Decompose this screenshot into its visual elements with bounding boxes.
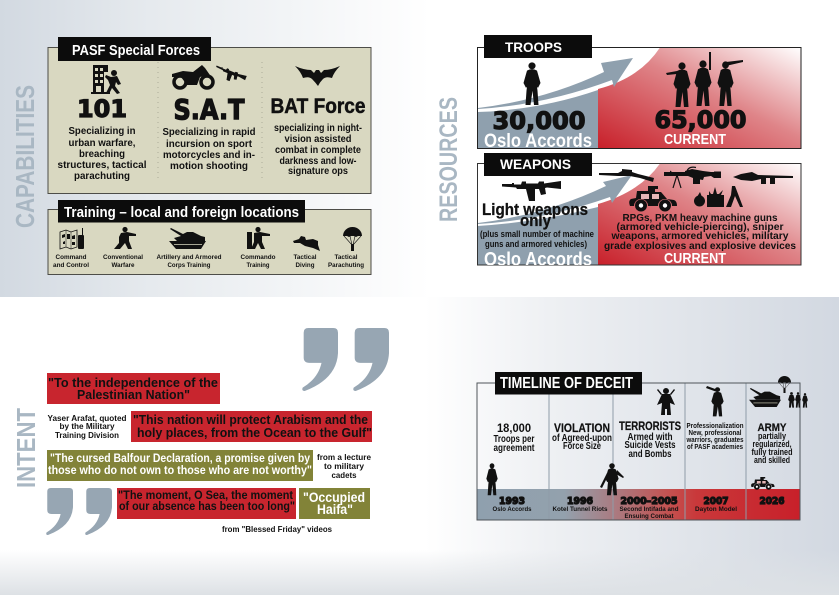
text block: BAT Force: combat in complete bbox=[275, 145, 361, 156]
timeline band bbox=[477, 489, 800, 520]
red current area bbox=[598, 48, 801, 148]
quote: sea: "The moment, O Sea, the moment bbox=[118, 490, 293, 502]
heading: timeline: TIMELINE OF DECEIT bbox=[500, 375, 633, 392]
icon: tank bbox=[749, 388, 781, 407]
icon: sniper rifle bbox=[599, 169, 654, 182]
column: violation: of Agreed-upon bbox=[552, 433, 612, 444]
year: 2026: 2026 bbox=[760, 496, 785, 507]
column: terrorists: TERRORISTS bbox=[619, 419, 681, 433]
section label: capabilities: CAPABILITIES bbox=[10, 85, 40, 228]
training labels: Tactical bbox=[334, 254, 358, 261]
text block: S.A.T: motorcycles and in- bbox=[163, 149, 255, 161]
arrow bbox=[478, 175, 632, 224]
attribution: Blessed Friday: from "Blessed Friday" videos bbox=[222, 524, 332, 534]
text block: light weapons: only bbox=[520, 211, 551, 230]
heading: troops bbox=[484, 35, 592, 58]
heading: weapons: WEAPONS bbox=[500, 156, 571, 172]
year: 2000-2005: Second Intifada and bbox=[620, 506, 678, 513]
text block: 101 bbox=[58, 95, 147, 182]
quote: Balfour bbox=[47, 450, 313, 481]
red current area bbox=[598, 164, 801, 265]
icon: bat bbox=[295, 66, 340, 86]
heading: troops: TROOPS bbox=[505, 39, 562, 55]
icon: parachute bbox=[778, 376, 791, 393]
icon: large closing quote bbox=[302, 328, 389, 391]
attribution: lecture: to military bbox=[324, 461, 364, 471]
training labels: and Control bbox=[53, 262, 89, 269]
icon: building and fighter bbox=[91, 65, 121, 94]
text block: current weapons: grade explosives and explosive devices bbox=[604, 240, 796, 252]
icon: RPG launcher bbox=[733, 172, 793, 184]
column: violation: Force Size bbox=[563, 441, 601, 452]
text block: light weapons: Light weapons bbox=[482, 200, 588, 219]
section label: resources: RESOURCES bbox=[435, 97, 463, 222]
training labels: Training bbox=[246, 262, 270, 269]
quote: independence: Palestinian Nation" bbox=[77, 387, 190, 402]
training labels: Warfare bbox=[112, 262, 135, 269]
year: 1993 bbox=[492, 496, 532, 513]
section label: intent: INTENT bbox=[11, 408, 41, 488]
label: Oslo Accords: Oslo Accords bbox=[484, 131, 592, 152]
icon: explosives bbox=[694, 187, 724, 207]
icon: humvee bbox=[629, 186, 677, 212]
year: 2000-2005 bbox=[620, 496, 678, 520]
heading: timeline bbox=[495, 372, 642, 394]
label: current: CURRENT bbox=[664, 250, 726, 267]
text block: light weapons bbox=[480, 200, 594, 249]
text block: BAT Force: vision assisted bbox=[284, 134, 352, 145]
training labels: Conventional bbox=[103, 254, 143, 261]
quote: independence bbox=[47, 373, 220, 404]
column: terrorists: Suicide Vests bbox=[624, 440, 676, 451]
column: 18,000: agreement bbox=[494, 443, 535, 454]
text block: BAT Force bbox=[270, 95, 366, 177]
column: professionalization bbox=[686, 421, 744, 451]
panel: PASF special forces bbox=[48, 37, 371, 194]
icon: map and radio bbox=[60, 228, 84, 249]
column: professionalization: New, professional bbox=[688, 428, 742, 437]
training labels: Command bbox=[56, 254, 87, 261]
icon: rifleman bbox=[706, 386, 724, 416]
text block: S.A.T bbox=[162, 93, 256, 172]
column: terrorists: Armed with bbox=[628, 432, 672, 443]
arrow bbox=[478, 58, 633, 109]
heading: training: Training – local and foreign locations bbox=[64, 205, 299, 221]
icon: suicide bomber bbox=[657, 388, 675, 415]
figure: 30,000: 30,000 bbox=[492, 107, 586, 135]
column: professionalization: Professionalization bbox=[686, 421, 744, 430]
panel: troops bbox=[478, 35, 801, 152]
text block: 101: 101 bbox=[77, 95, 127, 123]
label: current: CURRENT bbox=[664, 131, 726, 148]
text block: 101: structures, tactical bbox=[58, 159, 147, 171]
heading: training bbox=[58, 200, 305, 222]
column: terrorists bbox=[619, 419, 681, 460]
icon: masked fighter bbox=[600, 463, 624, 495]
training labels: Artillery and Armored bbox=[156, 254, 222, 261]
icon: motorcycle and rifle bbox=[172, 64, 247, 88]
icon: commando bbox=[247, 227, 270, 249]
icon: parachute bbox=[343, 227, 362, 251]
training labels: Corps Training bbox=[168, 262, 211, 269]
column: violation bbox=[552, 421, 612, 452]
icon: conventional soldier bbox=[114, 227, 136, 249]
year: 2000-2005: 2000–2005 bbox=[620, 496, 678, 507]
training labels: Diving bbox=[296, 262, 315, 269]
panel: weapons bbox=[478, 153, 801, 270]
heading: PASF Special Forces bbox=[58, 37, 211, 61]
column: army: regularized, bbox=[752, 439, 792, 449]
text block: S.A.T: incursion on sport bbox=[166, 138, 252, 150]
attribution: Arafat: by the Military bbox=[60, 421, 115, 431]
quote: Occupied Haifa: "Occupied bbox=[303, 489, 365, 505]
attribution: Arafat: Yaser Arafat, quoted bbox=[48, 413, 126, 423]
icon: soldier bbox=[524, 62, 540, 105]
text block: S.A.T: motion shooting bbox=[170, 160, 248, 172]
column: professionalization: warriors, graduates bbox=[686, 435, 744, 444]
column: 18,000 bbox=[494, 421, 535, 454]
column: 18,000: 18,000 bbox=[497, 421, 531, 435]
grey Oslo area bbox=[478, 207, 598, 265]
column: army: and skilled bbox=[754, 455, 790, 465]
training labels bbox=[53, 254, 364, 269]
column: army: ARMY bbox=[758, 422, 787, 434]
column: army: fully trained bbox=[752, 447, 792, 457]
column: terrorists: and Bombs bbox=[628, 449, 672, 460]
year: 1993: 1993 bbox=[499, 496, 525, 507]
quote: independence: "To the independence of the bbox=[48, 375, 218, 390]
column: army: partially bbox=[758, 431, 786, 441]
year: 2007: Dayton Model bbox=[695, 506, 737, 513]
quote: sea bbox=[117, 488, 296, 519]
icon: small quote bbox=[46, 488, 112, 535]
text block: BAT Force: BAT Force bbox=[270, 95, 366, 118]
year: 1993: Oslo Accords bbox=[492, 506, 532, 513]
text block: current weapons: weapons, armored vehicles, military bbox=[611, 230, 789, 242]
quote: Occupied Haifa bbox=[299, 488, 370, 519]
heading: weapons bbox=[484, 153, 592, 176]
text block: current weapons bbox=[604, 212, 796, 252]
column: 18,000: Troops per bbox=[494, 434, 535, 445]
icon: humvee bbox=[751, 477, 775, 490]
year: 2007: 2007 bbox=[704, 496, 728, 507]
text block: light weapons: guns and armored vehicles) bbox=[485, 239, 587, 249]
text block: S.A.T: S.A.T bbox=[174, 93, 244, 126]
text block: light weapons: (plus small number of machine bbox=[480, 229, 594, 239]
icon: early soldier bbox=[486, 463, 498, 495]
grey Oslo area bbox=[478, 90, 598, 148]
quote: Balfour: those who do not own to those who are not worthy" bbox=[48, 463, 312, 477]
quote: Arabism bbox=[131, 411, 372, 442]
training labels: Parachuting bbox=[328, 262, 364, 269]
heading: PASF Special Forces: PASF Special Forces bbox=[72, 43, 200, 59]
text block: S.A.T: Specializing in rapid bbox=[162, 126, 256, 138]
column: army bbox=[752, 422, 792, 465]
quote: Arabism: "This nation will protect Arabism and the bbox=[133, 412, 368, 427]
icon: diver bbox=[293, 236, 320, 251]
icon: mortar bbox=[726, 186, 743, 207]
label: Oslo Accords: Oslo Accords bbox=[484, 250, 592, 270]
icon: assault rifle bbox=[502, 181, 561, 201]
training labels: Tactical bbox=[294, 254, 317, 261]
icon: soldiers bbox=[788, 392, 808, 408]
figure: 65,000: 65,000 bbox=[654, 106, 746, 134]
text block: 101: breaching bbox=[79, 148, 125, 160]
attribution: Arafat: Training Division bbox=[55, 430, 119, 440]
text block: 101: parachuting bbox=[74, 170, 130, 182]
text block: BAT Force: specializing in night- bbox=[274, 123, 362, 134]
text block: 101: urban warfare, bbox=[68, 137, 136, 149]
training labels: Commando bbox=[240, 254, 276, 261]
icon: machine gun bbox=[664, 167, 721, 188]
quote: Balfour: "The cursed Balfour Declaration, a promise given by bbox=[50, 451, 310, 465]
attribution: Arafat bbox=[48, 413, 126, 440]
text block: current weapons: RPGs, PKM heavy machine guns bbox=[622, 212, 778, 224]
year: 2007 bbox=[695, 496, 737, 513]
year: 1996: 1996 bbox=[567, 496, 593, 507]
panel: training bbox=[48, 200, 371, 274]
quote: Occupied Haifa: Haifa" bbox=[317, 501, 353, 517]
column: professionalization: of PASF academies bbox=[687, 442, 743, 451]
year: 2000-2005: Ensuing Combat bbox=[624, 513, 674, 520]
quote: Arabism: holy places, from the Ocean to the Gulf" bbox=[137, 425, 372, 440]
year: 1996: Kotel Tunnel Riots bbox=[552, 506, 608, 513]
attribution: lecture: from a lecture bbox=[317, 452, 371, 462]
text block: current weapons: (armored vehicle-piercing), sniper bbox=[616, 221, 784, 233]
icon: tank bbox=[169, 228, 206, 249]
text block: BAT Force: darkness and low- bbox=[280, 156, 356, 167]
text block: 101: Specializing in bbox=[68, 125, 136, 137]
icon: three soldiers bbox=[666, 52, 743, 107]
year: 1996 bbox=[552, 496, 608, 513]
attribution: lecture: cadets bbox=[332, 470, 357, 480]
column: violation: VIOLATION bbox=[554, 421, 610, 435]
attribution: lecture bbox=[317, 452, 371, 480]
quote: sea: of our absence has been too long" bbox=[119, 501, 295, 513]
panel: timeline bbox=[477, 372, 808, 520]
text block: BAT Force: signature ops bbox=[288, 166, 348, 177]
